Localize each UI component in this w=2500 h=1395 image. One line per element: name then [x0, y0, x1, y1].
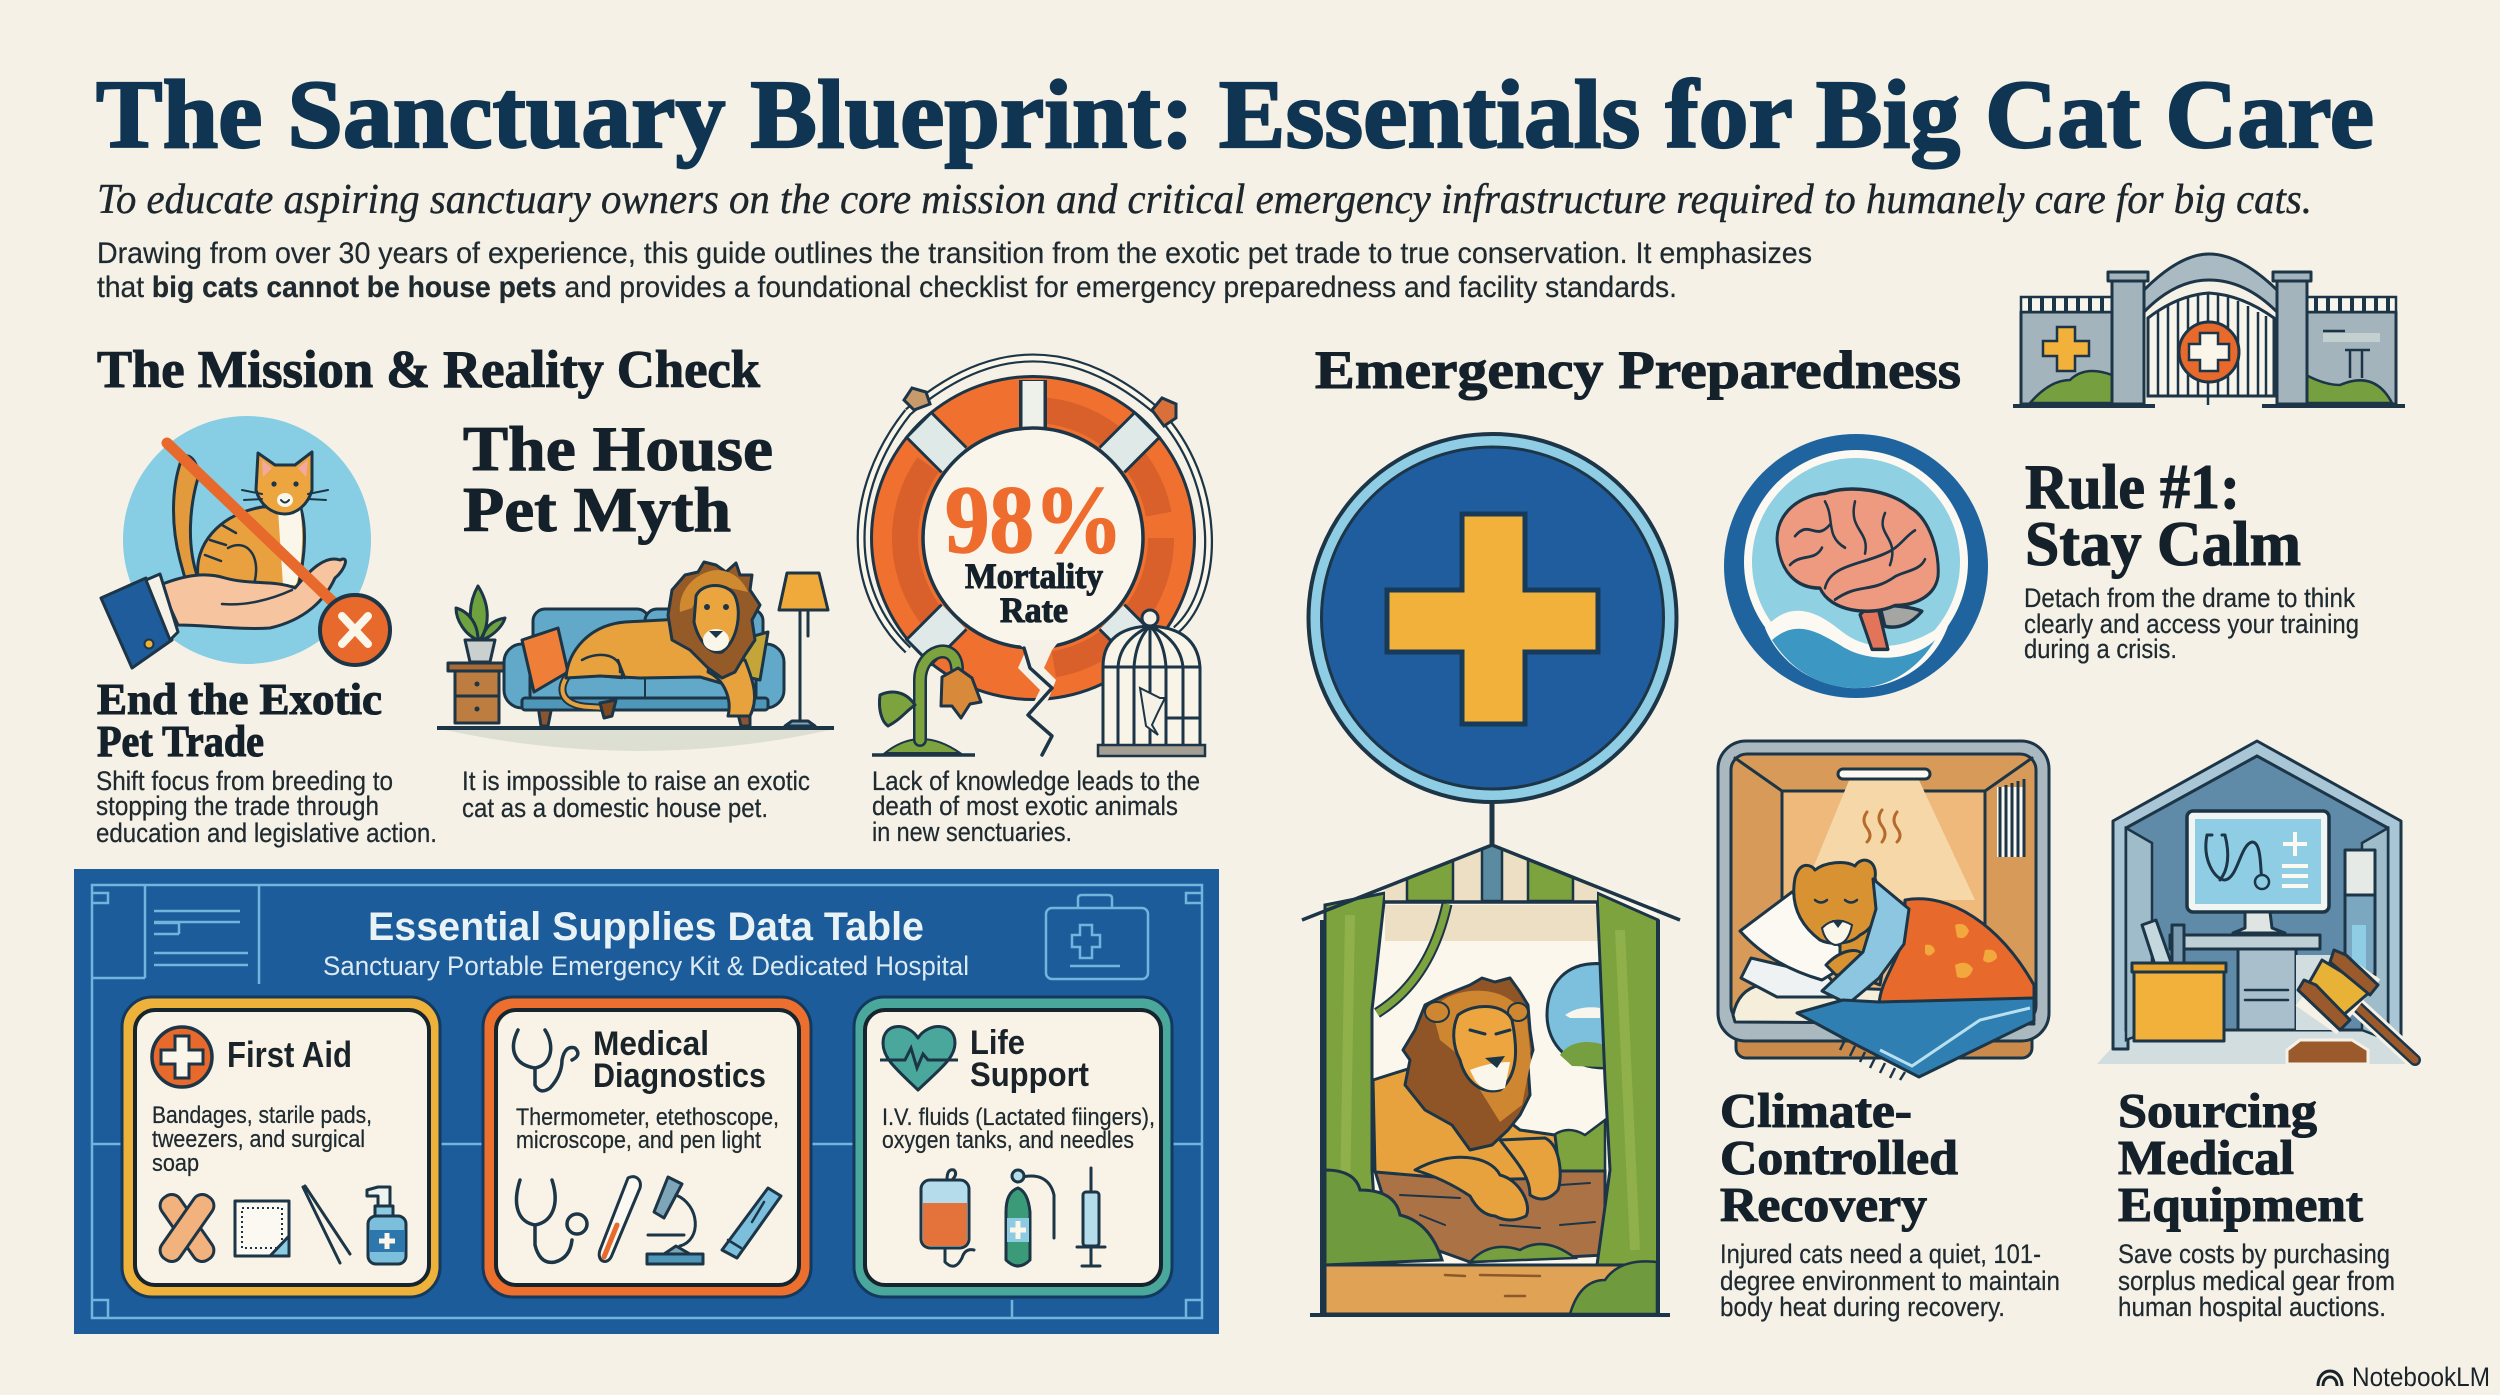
icon: house cat	[174, 452, 328, 590]
icon: oxygen tank	[1006, 1170, 1054, 1266]
heading: First Aid	[227, 1034, 352, 1075]
cougar	[1794, 860, 1900, 985]
card heading: end the exotic pet trade: Pet Trade	[97, 717, 264, 766]
subtitle: To educate aspiring sanctuary owners on the core mission and critical emergency infrastructure required to humanely care for big cats.	[97, 177, 2312, 223]
panel title: Essential Supplies Data Table	[368, 905, 924, 949]
heading	[593, 1025, 766, 1095]
icon: iv bag	[921, 1170, 974, 1266]
text: house pet myth description	[462, 766, 810, 823]
icon: open hand	[160, 559, 345, 628]
icon: pen light	[722, 1188, 781, 1258]
list text: Bandages, starile pads,	[152, 1102, 372, 1129]
text: stay calm description	[2024, 583, 2359, 664]
monitor	[2187, 811, 2329, 933]
blue scarf	[1822, 879, 1909, 1004]
text: house pet myth description: cat as a domestic house pet.	[462, 793, 768, 823]
log	[1375, 1171, 1605, 1262]
text: stay calm description: during a crisis.	[2024, 634, 2177, 664]
icon: side table	[448, 663, 506, 723]
icon: suit sleeve	[101, 574, 178, 668]
icon: bandages	[156, 1191, 218, 1265]
heading: sourcing medical equipment	[2118, 1083, 2364, 1232]
list text: oxygen tanks, and needles	[882, 1127, 1134, 1154]
yellow cross	[2043, 327, 2089, 371]
text: end trade description: Shift focus from breeding to	[96, 766, 393, 796]
icon: red x badge	[320, 595, 390, 665]
list text: microscope, and pen light	[516, 1127, 761, 1154]
stat: 98%: 98%	[945, 466, 1123, 573]
icon: blueprint first aid kit	[1046, 895, 1148, 979]
ground	[1325, 1265, 1657, 1314]
list text: I.V. fluids (Lactated fiingers),	[882, 1104, 1155, 1131]
text: recovery description: Injured cats need a quiet, 101-	[1720, 1239, 2041, 1269]
icon: sanctuary gate	[2013, 254, 2405, 406]
icon: large medical cross badge	[1308, 434, 1676, 846]
card: medical diagnostics	[483, 997, 811, 1297]
illustration: habitat with lion	[1302, 845, 1680, 1316]
intro text: Drawing from over 30 years of experience, this guide outlines the transition from the exotic pet trade to true conservation. It emphasizes	[97, 237, 1812, 270]
crack	[1014, 640, 1060, 755]
card heading: the house pet myth: Pet Myth	[463, 475, 731, 545]
icon: sofa	[504, 609, 784, 726]
icon: hand holding cat with prohibition	[101, 416, 390, 668]
vine	[1377, 904, 1447, 1013]
heading: sourcing medical equipment: Equipment	[2118, 1177, 2364, 1232]
list text: tweezers, and surgical	[152, 1126, 365, 1153]
card heading: the house pet myth	[463, 414, 773, 545]
card heading: end the exotic pet trade: End the Exotic	[97, 675, 382, 724]
desk	[2170, 935, 2336, 1030]
illustration: hospital room with auction gavel	[2097, 741, 2415, 1064]
IV stand	[2345, 850, 2375, 975]
brain	[1777, 489, 1938, 649]
front bushes	[1325, 1170, 1442, 1265]
label: mortality rate	[965, 556, 1103, 630]
lion	[1373, 978, 1560, 1220]
heading: the mission and reality check: The Mission & Reality Check	[97, 341, 761, 399]
blanket blue	[1797, 998, 2034, 1080]
roof	[1302, 845, 1680, 920]
icon: potted plant	[456, 586, 505, 662]
text: mortality description	[872, 766, 1200, 847]
list text	[152, 1102, 372, 1177]
sky window	[1547, 964, 1605, 1068]
illustration: broken life ring	[861, 358, 1209, 756]
heading: Diagnostics	[593, 1057, 766, 1095]
intro text	[97, 237, 1812, 304]
text: end trade description: stopping the trade through	[96, 791, 379, 821]
supply box	[2132, 920, 2226, 1041]
icon: medical cross	[152, 1027, 212, 1087]
text: mortality description: in new senctuaries.	[872, 817, 1072, 847]
icon: wilted plant	[872, 651, 981, 755]
heading: emergency preparedness: Emergency Preparedness	[1315, 340, 1961, 400]
panel subtitle: Sanctuary Portable Emergency Kit & Dedicated Hospital	[323, 951, 969, 981]
rope	[861, 358, 1209, 650]
text: sourcing description: human hospital auctions.	[2118, 1292, 2386, 1322]
heading: Support	[970, 1056, 1089, 1094]
icon: calm brain badge	[1724, 434, 1988, 698]
water wave	[1765, 611, 1950, 688]
heading: climate controlled recovery	[1720, 1083, 1958, 1232]
text: recovery description	[1720, 1239, 2060, 1322]
card heading: end the exotic pet trade	[97, 675, 382, 766]
intro text: that big cats cannot be house pets and provides a foundational checklist for emergency preparedness and facility standards.	[97, 271, 1677, 304]
label: mortality rate: Rate	[1000, 590, 1068, 630]
text: stay calm description: clearly and access your training	[2024, 609, 2359, 639]
text: stay calm description: Detach from the drame to think	[2024, 583, 2355, 613]
list text	[882, 1104, 1155, 1154]
list text: Thermometer, etethoscope,	[516, 1104, 779, 1131]
card heading: the house pet myth: The House	[463, 414, 773, 484]
heading: climate controlled recovery: Controlled	[1720, 1130, 1958, 1185]
list text	[516, 1104, 779, 1154]
heading: climate controlled recovery: Climate-	[1720, 1083, 1912, 1138]
card: life support	[854, 997, 1172, 1297]
arch	[2144, 254, 2277, 312]
icon: gavel	[2287, 950, 2415, 1064]
illustration: lion on a sofa	[437, 562, 834, 751]
heading: climate controlled recovery: Recovery	[1720, 1177, 1928, 1232]
text: house pet myth description: It is impossible to raise an exotic	[462, 766, 810, 796]
title: The Sanctuary Blueprint: Essentials for Big Cat Care	[96, 61, 2374, 169]
heading: rule 1 stay calm: Stay Calm	[2025, 509, 2301, 579]
gate bars	[2148, 293, 2274, 405]
vent	[1997, 779, 2025, 857]
icon: soap bottle	[367, 1187, 406, 1264]
heading: sourcing medical equipment: Sourcing	[2118, 1083, 2318, 1138]
heading: rule 1 stay calm	[2025, 452, 2301, 579]
icon: heart with pulse	[880, 1027, 958, 1090]
text: mortality description: Lack of knowledge leads to the	[872, 766, 1200, 796]
heading: rule 1 stay calm: Rule #1:	[2025, 452, 2240, 522]
text: mortality description: death of most exotic animals	[872, 791, 1178, 821]
pillows	[1740, 892, 1853, 997]
text: sourcing description	[2118, 1239, 2395, 1322]
icon: sterile pad	[235, 1201, 289, 1256]
mattress	[1733, 985, 2034, 1024]
text: sourcing description: sorplus medical gear from	[2118, 1266, 2395, 1296]
text: end trade description	[96, 766, 437, 848]
text: recovery description: body heat during recovery.	[1720, 1292, 2005, 1322]
heading: Medical	[593, 1025, 709, 1063]
illustration: lion	[562, 562, 760, 718]
panel: essential supplies data table	[74, 869, 1219, 1334]
list text: soap	[152, 1150, 199, 1177]
blueprint frame	[92, 885, 1202, 1318]
icon: syringe	[1077, 1168, 1105, 1266]
back bushes	[1540, 1120, 1605, 1175]
blanket orange	[1879, 899, 2034, 1005]
icon: thermometer	[599, 1177, 640, 1261]
text: end trade description: education and legislative action.	[96, 818, 437, 848]
icon: tweezers	[303, 1186, 350, 1263]
icon: microscope	[647, 1177, 703, 1264]
heading	[970, 1024, 1089, 1094]
text: recovery description: degree environment to maintain	[1720, 1266, 2060, 1296]
card: first aid	[122, 997, 440, 1297]
curtains	[1325, 893, 1658, 1265]
icon: stethoscope	[513, 1030, 578, 1091]
text: sourcing description: Save costs by purchasing	[2118, 1239, 2390, 1269]
heading: sourcing medical equipment: Medical	[2118, 1130, 2294, 1185]
icon: floor lamp	[779, 573, 828, 726]
icon: broken bird cage	[1098, 610, 1205, 756]
illustration: climate controlled kennel	[1718, 741, 2049, 1080]
heat waves	[1864, 810, 1900, 842]
icon: stethoscope large	[516, 1180, 587, 1262]
heading: Life	[970, 1024, 1025, 1062]
label: mortality rate: Mortality	[965, 556, 1103, 596]
